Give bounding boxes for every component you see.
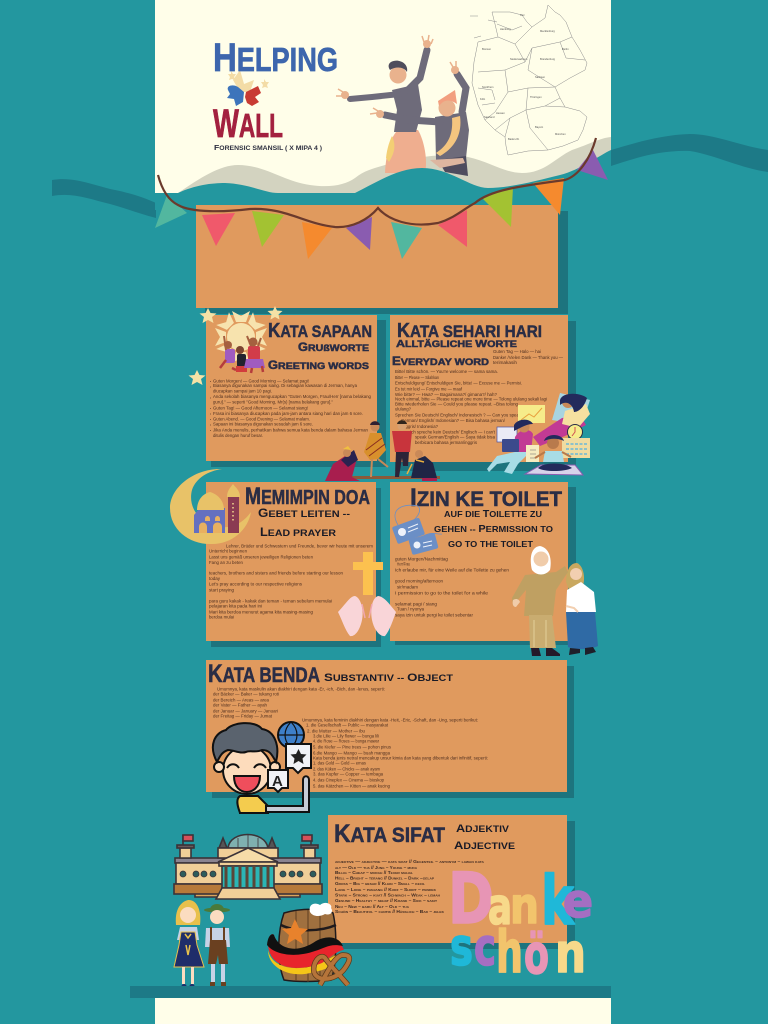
side wave: left [52,179,156,218]
body text: Fang an zu beten [209,560,243,565]
Danke schön lettering: a [488,878,512,936]
body text: alt — Old — tua // Jung – Young – muda [335,865,418,870]
side wave: right [611,134,768,172]
body text: Schön – Beautiful – cantik // Hässlich – Bad – jelek [335,909,445,914]
Danke schön lettering: c [474,918,496,978]
title: Helping Wall: HELPING [213,36,338,80]
body text: Mari kita berdoa menurut agama kita masing-masing [209,610,313,614]
body text [209,544,373,620]
heading: KATA SAPAAN [268,320,372,342]
illustration: Reichstag building [174,834,322,899]
illustration: Germany map: Berlin [562,47,569,51]
Danke schön lettering: n [555,922,586,985]
body text: Guten Abend. — Good Evening — Selamat malam. [213,416,310,422]
header: cream background with waves [155,0,611,210]
body text: Herr/Frau [397,562,410,566]
illustration: Germany map: Saarland [484,115,495,119]
body text: feminine and neuter nouns [302,718,488,788]
body text: masculine nouns: der Freitag — Friday — Jumat [213,714,273,718]
body text: Bitte/ Bitte schön. — You're welcome — sama sama. [395,369,498,374]
heading [392,320,542,368]
body text: Sprechen Sie Deutsch/ Englisch/ Indonesisch ? — Can you speak [395,412,522,418]
illustration: Germany map: München [555,132,566,136]
body text: Inggris/ Indonesia? [402,424,438,429]
body text: Bitte wiederholen Sie — Could you please repeat. –Bisa tolong [395,402,518,406]
panel: blank top banner [196,205,568,314]
illustration: Germany map: Brandenburg [540,57,556,61]
title: Helping Wall: FORENSIC SMANSIL ( X MIPA 4 ) [214,143,322,152]
panel: Kata sapaan [188,306,386,467]
body text: feminine and neuter nouns: Umumnya, kata feminin diakhiri dengan kata -Heit, -Eric, -Schaft, dan -Ung, seperti berikut: [302,718,478,722]
body text: ululang? [395,406,411,412]
body text: Sapaan ini biasanya digunakan sesudah jam 6 sore. [213,422,313,426]
body text: feminine and neuter nouns: Kata benda jenis netral mencakup unsur kimia dan kata yang dibentuk dari infinitif, seperti: [313,756,488,760]
illustration: boy with laptop and language bubbles: A [272,773,283,790]
icon: stars [188,306,282,385]
illustration: children in Bavarian dress [174,900,230,988]
body text: feminine and neuter nouns: 1. die Gesellschaft — Public — masyarakat [306,722,389,728]
heading [245,483,370,539]
body text: masculine nouns: der Januar — January — Januari [213,708,278,714]
illustration: Germany map: Kiel [520,13,525,17]
heading: AUF DIE TOILETTE ZU [444,509,542,520]
heading: SUBSTANTIV -- OBJECT [324,672,454,684]
icon: sun with children [215,311,267,373]
body text: Guten Morgen! — Good Morning — Selamat pagi! [213,378,309,384]
body text: masculine nouns [213,686,385,718]
body text: Bitte! — Please — Silahkan [395,375,439,380]
body text: I permission to go to the toilet for a while [395,590,488,596]
body text: selamat pagi / siang [395,602,437,606]
illustration: Germany map: Köln [480,97,486,101]
illustration: Germany map [470,5,587,155]
body text: Ich spreche kein Deutsch/ Englisch — I can't [410,430,496,434]
heading: GEBET LEITEN -- [258,508,350,520]
body text: good morning/afternoon [395,578,443,584]
body text: start praying [209,588,234,592]
body text: masculine nouns: Umumnya, kata maskulin akan diakhiri dengan kata -Er, -ich, -Bich, dan -lenus, seperti: [217,686,385,692]
heading: GEHEN -- PERMISSION TO [434,524,553,535]
heading: IZIN KE TOILET [410,484,562,512]
body text: para guru kakak - kakak dan teman - teman sebelum memulai [209,598,332,604]
logo: Philippine flower [227,70,269,106]
body text: Lasst uns gemäß unseren jeweiligen Religionen beten [209,554,313,560]
Danke schön lettering [448,858,593,986]
body text: masculine nouns: der Vater — Father — ayah [213,702,267,708]
body text: adjektive — adjective — kata sifat // Gegenteil – antonym – lawan kata [335,859,485,864]
body text: ditulis dengan huruf besar. [213,433,263,438]
heading [410,484,562,549]
Danke schön lettering: k [541,862,575,941]
body text: feminine and neuter nouns: 6.die Mango — Mango — buah mangga [313,750,390,756]
body text: feminine and neuter nouns: 3.die Lilie — Lily flower — bunga lili [313,734,379,738]
body text: Billig – Cheap – murah // Teuer mahal [335,870,413,875]
illustration: beer barrel with German flag and pretzel [267,903,349,985]
body text: Es tut mir leid — Forgive me — maaf [395,386,463,392]
heading: ALLTÄGLICHE WORTE [396,338,517,350]
heading [208,660,454,688]
body text: feminine and neuter nouns: 1. das Gold — Gold — emas [313,760,367,766]
body text: Guten Tag! — Good Afternoon — Selamat siang! [213,406,308,410]
body text: German/ English/ Indonesian? — Bisa bahasa jerman/ [401,418,506,423]
body text: feminine and neuter nouns: 5. das Kätzchen — Kitten — anak kucing [313,784,390,788]
heading: GREETING WORDS [268,360,369,372]
illustration: Germany map: Nordrhein [482,85,494,89]
icon: praying hands and cross [338,552,396,636]
heading: MEMIMPIN DOA [245,483,370,510]
body text: Jika Anda menulis, perhatikan bahwa semua kata benda dalam bahasa Jerman [213,428,368,432]
panel: Memimpin doa [170,469,381,647]
body text: speak German/English — Saya tidak bisa [415,434,495,440]
illustration: Germany map: Hessen [496,111,505,115]
Danke schön lettering: h [496,918,523,986]
body text: Frasa ini biasanya diucapkan pada jam-jam antara siang hari dan jam 6 sore. [213,411,363,416]
Danke schön lettering: s [450,918,473,978]
body text: Groß – Big – besar // Klein – Small – kecil [335,881,425,886]
illustration: traditional dress figures [325,420,440,481]
body text: Biasanya digunakan sampai siang. Di sebagian kawasan di Jerman, hanya [213,383,357,388]
body text: diucapkan sampai jam 10 pagi. [213,388,272,394]
body text [335,859,485,914]
Danke schön lettering: e [563,874,593,928]
title: Helping Wall [213,36,338,152]
Danke schön lettering: D [448,858,494,940]
Danke schön lettering: ö [524,923,549,986]
body text [395,556,509,618]
heading [334,820,515,852]
illustration: Germany map: Thüringen [530,95,542,99]
body text [395,349,563,445]
panel: Kata sehari hari [390,315,590,475]
illustration: Germany map: Hamburg [500,27,511,31]
body text: Gesund – Healthy – sehat // Krank – Sick – sakit [335,898,437,903]
title: Helping Wall: WALL [213,102,283,146]
illustration: Germany map: Mecklenburg [540,29,555,33]
illustration: boy with laptop and language bubbles [213,722,311,813]
body text: Entschuldigung/ Entschuldigen Sie, bitte! — Excuse me — Permisi. [395,380,522,386]
icon: ID cards [392,505,442,555]
heading: LEAD PRAYER [260,527,336,539]
body text: Hell – Bright – terang // Dunkel – Dark –gelap [335,876,434,880]
panel: Kata sifat [328,815,575,949]
heading: GO TO THE TOILET [448,539,534,549]
body text: guten Morgen/Nachmittag [395,556,448,562]
body text: sir/madam [397,584,418,590]
body text: teachers, brothers and sisters and friends before starting our lesson [209,570,343,576]
body text: Let's pray according to our respective religions [209,582,303,586]
body text: Lang – Long – panjang // Kurz – Short – pendek [335,887,437,892]
bullets [209,382,212,430]
illustration: Germany map: Bremen [482,47,492,51]
panel: Izin ke toilet [390,482,576,645]
body text: Noch einmal, bitte — Please repeat one more time — Tolong ululang sekali lagi [395,396,547,402]
body text: Ich erlaube mir, für eine Weile auf die Toilette zu gehen [395,568,509,572]
body text: terimakasih [493,360,517,365]
illustration: two women in uniform and hijab [512,546,598,656]
illustration: office group [487,393,590,475]
body text: Tuan / nyonya [397,606,424,612]
body text: guru]." — seperti "Good Morning, Mr(s) [nama belakang guru]." [213,400,333,404]
heading: GRUßWORTE [298,342,369,354]
body text: Danke! /Vielen Dank — Thank you — [493,355,563,360]
body text: masculine nouns: der Bereich — Areas — area [213,698,269,702]
illustration: Germany map: Niedersachsen [510,57,528,61]
heading [268,320,372,372]
illustration: Germany map: Bayern [535,125,544,129]
body text: masculine nouns: der Bäcker — Baker — tukang roti [213,692,279,696]
body text: feminine and neuter nouns: 2. das Küken — Chicks — anak ayam [313,766,380,772]
body text: Wie bitte? — Hwa? — Bagaimana?/ gimana?/ hah? [395,392,497,397]
body text: feminine and neuter nouns: 4. das Cineplex — Cinema — bioskop [313,778,384,782]
heading: KATA BENDA [208,660,320,688]
illustration: dancers [336,35,469,176]
body text: Lehrer, Brüder und Schwestern und Freunde, bevor wir heute mit unserem [226,544,373,548]
body text: berdoa mulai [209,614,234,620]
body text: today [209,576,221,581]
body text: Unterricht beginnen [209,548,247,554]
body text: feminine and neuter nouns: 2. die Mutter — Mother — ibu [307,728,365,734]
illustration: Germany map: Sachsen [535,75,546,79]
body text: feminine and neuter nouns: 3. das Kupfer — Copper — tembaga [313,772,383,776]
body text: Stark – Strong – kuat // Schwach – Weak – lemah [335,892,440,898]
body text: pelajaran kita pada hari ini [209,604,262,608]
heading: KATA SEHARI HARI [397,320,542,342]
Danke schön lettering: n [510,877,539,935]
icon: crescent and mosque [170,469,251,544]
heading: KATA SIFAT [334,820,445,848]
heading: ADJECTIVE [454,840,515,852]
body text: Guten Tag — Halo — hai [493,349,541,354]
body text: feminine and neuter nouns: 4. die Rose — Roses — bunga mawar [313,738,379,744]
body text: Anda sekolah biasanya mengucapkan "Guten Morgen, Frau/Herr [nama belakang [213,394,371,399]
body text: feminine and neuter nouns: 5. die Kiefer — Pine trees — pohon pinus [313,744,392,750]
bunting [155,138,608,259]
footer band [130,986,611,1024]
body text: saya izin untuk pergi ke toilet sebentar [395,612,473,618]
panel: Kata benda [206,660,574,798]
heading: ADJEKTIV [456,823,509,835]
body text: Neu – New – baru // Alt – Old – tua [335,904,410,909]
heading: EVERYDAY WORD [392,356,489,368]
body text: berbicara bahasa jerman/inggris [415,440,478,445]
illustration: Germany map: Baden-W. [508,137,520,141]
body text [213,378,371,438]
